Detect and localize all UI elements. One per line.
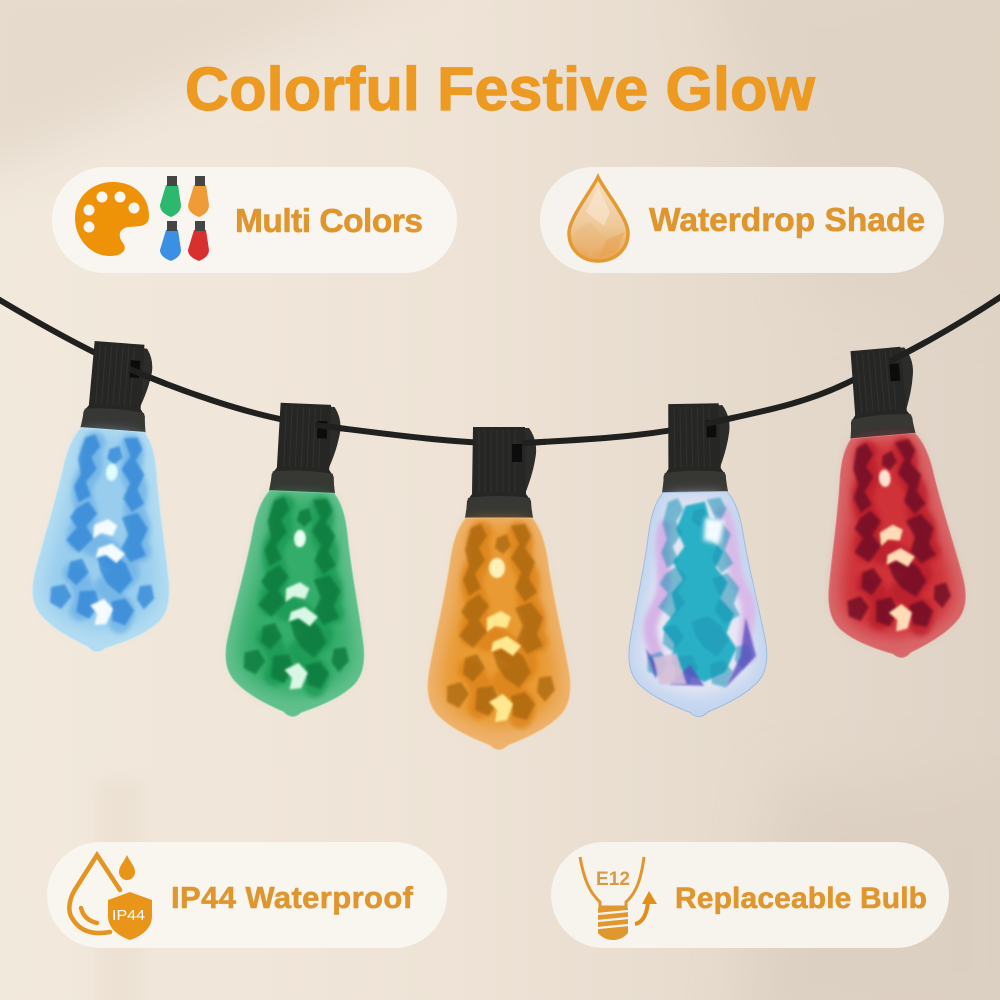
icon: four mini bulbs	[160, 176, 209, 261]
red glass body	[815, 430, 970, 663]
icon: water drops with IP44 shield	[69, 855, 152, 940]
bulb 1: blue	[28, 338, 188, 657]
label: multi colors: Multi Colors	[235, 203, 423, 240]
multicolor glass body	[626, 491, 768, 718]
label: IP44 waterproof: IP44 Waterproof	[171, 880, 414, 915]
green glass body	[223, 489, 371, 719]
icon: water drops with IP44 shield: IP44	[112, 907, 145, 924]
bulb 3: orange	[428, 427, 570, 750]
string wire	[0, 296, 1000, 443]
icon: E12 bulb with arrow	[580, 857, 657, 940]
label: waterdrop shade: Waterdrop Shade	[649, 202, 925, 239]
wire passing in front of the sockets	[130, 339, 925, 446]
bulb 4: multicolor	[625, 403, 768, 718]
bulb 5: red	[807, 343, 970, 663]
icon: faceted waterdrop	[569, 177, 628, 261]
label: replaceable bulb: Replaceable Bulb	[675, 882, 927, 915]
pill: multi colors	[52, 167, 457, 273]
orange glass body	[428, 518, 570, 750]
pill: replaceable bulb	[551, 842, 949, 948]
title: Colorful Festive Glow	[185, 55, 816, 123]
bulb 2: green	[223, 401, 375, 719]
blue glass body	[28, 425, 181, 657]
socket clips behind the wire	[131, 347, 917, 494]
icon: palette	[75, 182, 149, 256]
pill: waterdrop shade	[540, 167, 944, 273]
pill: IP44 waterproof	[47, 842, 447, 948]
icon: E12 bulb with arrow: E12	[596, 869, 630, 890]
